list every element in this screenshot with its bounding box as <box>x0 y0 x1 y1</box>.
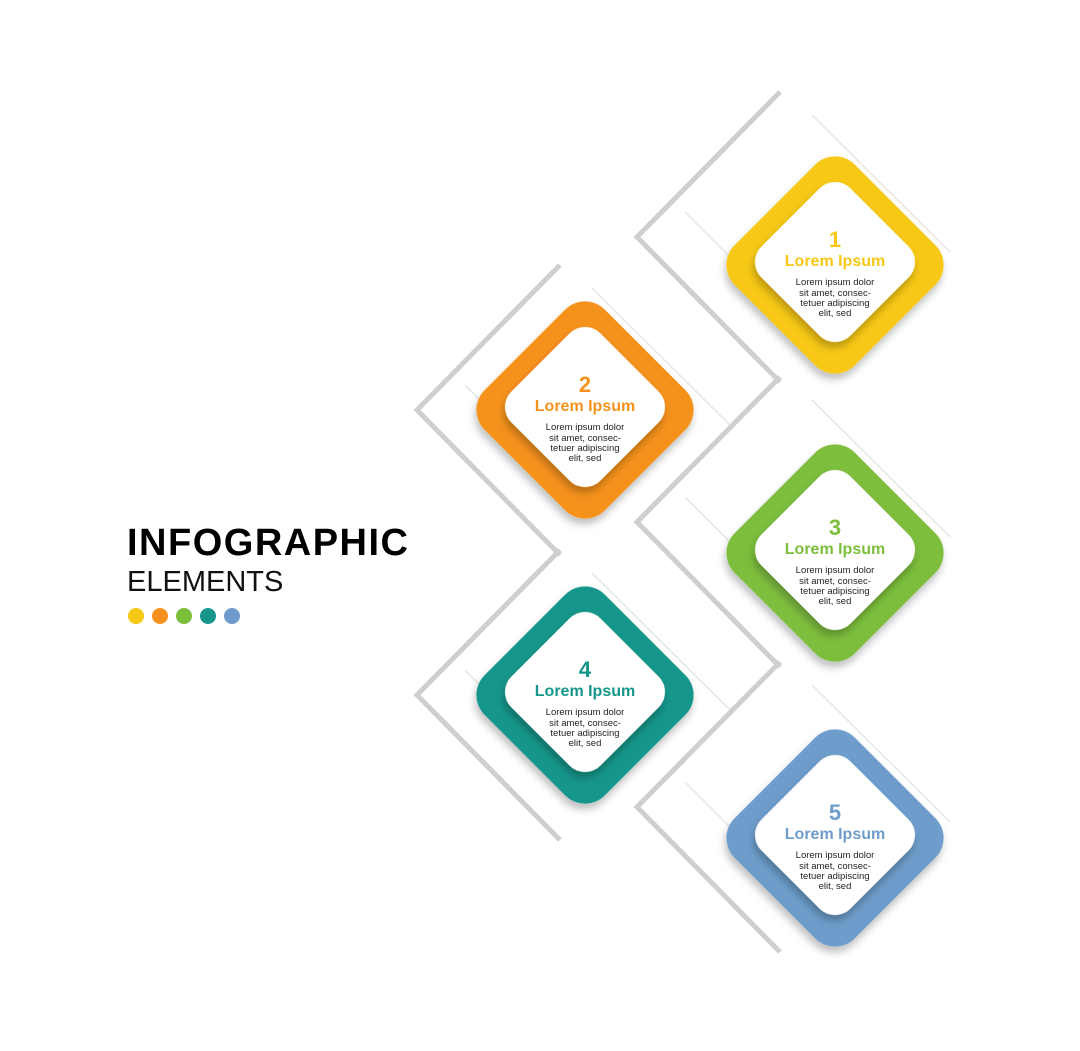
step 4: Lorem Ipsum <box>535 683 635 700</box>
step 2: Lorem ipsum dolor <box>546 422 624 433</box>
chevron frames <box>417 92 950 952</box>
step 5: Lorem ipsum dolor <box>796 850 874 861</box>
step 2 <box>465 290 705 530</box>
step 3 <box>715 433 955 673</box>
step 4: elit, sed <box>569 738 601 749</box>
step 4: sit amet, consec- <box>549 718 621 729</box>
step 4: Lorem ipsum dolor <box>546 707 624 718</box>
step 3: tetuer adipiscing <box>800 586 870 597</box>
step 5 <box>715 718 955 958</box>
step 2: elit, sed <box>569 453 601 464</box>
step 4: 4 <box>579 657 592 682</box>
step 1: elit, sed <box>819 308 851 319</box>
step 2: sit amet, consec- <box>549 433 621 444</box>
step 5: 5 <box>829 800 841 825</box>
step 4 <box>465 575 705 815</box>
step 5: Lorem Ipsum <box>785 826 885 843</box>
title: ELEMENTS <box>127 566 283 598</box>
step 2: 2 <box>579 372 591 397</box>
step 3: 3 <box>829 515 841 540</box>
step 1: sit amet, consec- <box>799 288 871 299</box>
step 1: tetuer adipiscing <box>800 298 870 309</box>
step 5: tetuer adipiscing <box>800 871 870 882</box>
title <box>127 522 410 598</box>
step 3: elit, sed <box>819 596 851 607</box>
color dots <box>128 608 240 624</box>
step 1: 1 <box>829 227 841 252</box>
step 2: Lorem Ipsum <box>535 398 635 415</box>
step 3: sit amet, consec- <box>799 576 871 587</box>
step 5: sit amet, consec- <box>799 861 871 872</box>
title: INFOGRAPHIC <box>127 522 410 564</box>
step 1 <box>715 145 955 385</box>
step 4: tetuer adipiscing <box>550 728 620 739</box>
step 1: Lorem ipsum dolor <box>796 277 874 288</box>
step 3: Lorem ipsum dolor <box>796 565 874 576</box>
step 5: elit, sed <box>819 881 851 892</box>
step 1: Lorem Ipsum <box>785 253 885 270</box>
step 2: tetuer adipiscing <box>550 443 620 454</box>
step 3: Lorem Ipsum <box>785 541 885 558</box>
